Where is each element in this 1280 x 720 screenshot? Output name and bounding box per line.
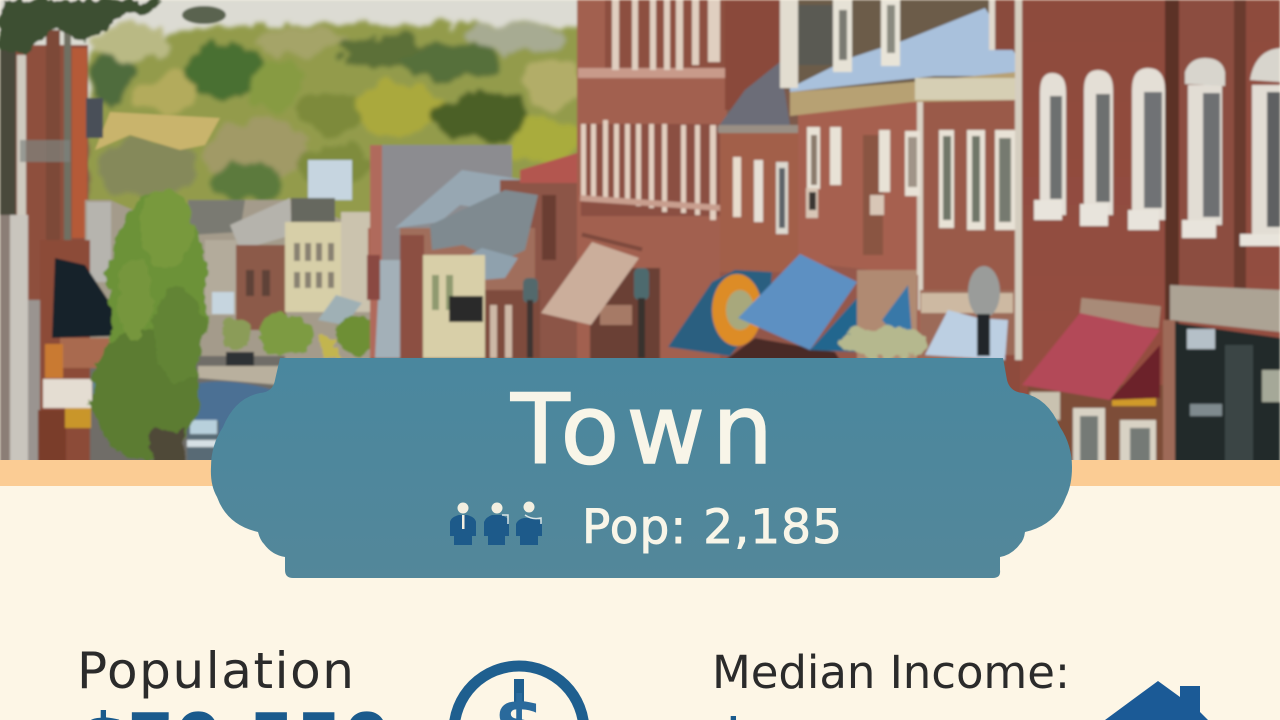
flowering bush [841,326,929,358]
shop windows below awning [1030,392,1156,465]
round shop sign with dark blue canopy [668,270,772,356]
sky [0,0,579,100]
hanging white sign [43,379,92,408]
tree silhouette on the ridge [182,6,226,24]
mansard roof and dormers [780,0,1020,92]
street floor [85,356,285,466]
beige shop awning [541,242,660,360]
white-blue awning [925,310,1008,360]
brick building mid street [236,245,286,330]
siding facades [798,95,1016,360]
car [187,420,219,462]
tall tree [91,188,208,465]
small awning mid street [318,295,362,325]
icon: three people [450,502,542,545]
lower arched opening [1028,385,1163,465]
stat label: Population [77,642,354,700]
stat label: Median Income: [712,646,1070,699]
icon: dollar coin [454,666,584,720]
large brick building [577,0,728,360]
sidewalk [198,366,280,385]
person 1 [450,502,476,545]
foliage upper left [0,0,160,55]
street lamp [968,266,1000,356]
red awning [1022,313,1160,400]
street lantern on left building [86,98,103,138]
wooded hillside [86,15,579,220]
stone band on dark storefront [1170,285,1280,332]
small street trees [223,313,380,358]
right brick building [1005,0,1280,465]
parked cars far [224,350,256,366]
open field [95,112,220,150]
blue-white building [308,160,352,200]
road [194,380,271,434]
dark storefront [1175,323,1280,465]
orange sign [65,408,91,428]
cornice [790,72,1016,116]
lower storefront walls [720,262,1016,360]
hero photo: town main street [0,0,1280,470]
arched windows [1034,48,1280,246]
stat: population [77,642,390,720]
grey building with slate roofs [367,145,577,358]
street lanterns [523,268,649,358]
photo base tone [86,48,1016,378]
person 2 [484,502,509,545]
icon: house [1105,681,1208,720]
black awning [52,258,118,338]
tower section and slate roof [716,0,798,275]
distant street buildings [85,200,370,370]
person 3 [516,502,542,545]
blue awning [738,254,857,352]
cream building with windows [285,222,341,312]
title banner [211,358,1072,578]
stone trim above red awning [1079,298,1161,328]
banner heading: Town [510,374,773,486]
banner shape [211,358,1072,578]
small blue awning right [881,285,912,331]
population figure: Pop: 2,185 [582,500,842,555]
dark shop base [725,338,840,360]
peach band [0,460,1280,486]
left building, upper [14,44,90,300]
lower-left building and awning [0,215,118,465]
stat: median income [710,646,1070,720]
dark roof [291,198,335,224]
